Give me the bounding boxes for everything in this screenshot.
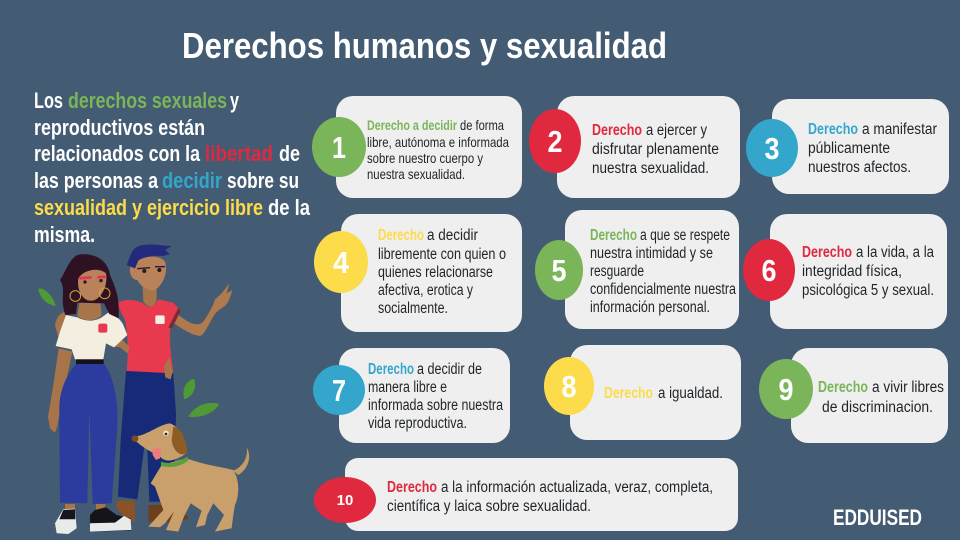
icon: number 10: 10 [337,492,353,509]
panel: derecho 3 [746,99,949,194]
icon: number 3: 3 [764,131,780,166]
text: derecho 5: Derecho [590,227,637,244]
text: derecho 1: nuestra sexualidad. [367,166,465,182]
intro text block: sobre su [227,168,299,193]
text: derecho 9 [818,379,944,416]
text: derecho 6: Derecho [802,244,852,261]
dog [132,423,249,532]
text: derecho 10: Derecho [387,479,437,496]
text: derecho 4: libremente con quien o [378,246,506,263]
icon: number 2: 2 [548,124,562,159]
intro text block: sexualidad y ejercicio libre [34,195,263,220]
icon: number 8 [544,357,594,415]
icon: number 5: 5 [552,253,566,288]
text: derecho 3 [808,121,937,176]
intro text block: las personas a [34,168,158,193]
text: derecho 7: a decidir de [417,361,482,378]
text: derecho 6: a la vida, a la [856,244,934,261]
intro text block: y [230,88,239,113]
text: derecho 10: a la información actualizada, veraz, completa, [441,479,713,496]
icon: number 9 [759,359,813,419]
icon: number 4: 4 [333,245,350,280]
icon: number 4 [314,231,368,293]
text: derecho 1: sobre nuestro cuerpo y [367,150,483,166]
intro text block: relacionados con la [34,141,200,166]
panel: derecho 2 [529,96,740,198]
text: derecho 1: de forma [460,117,504,133]
icon: number 2 [529,109,581,173]
text: derecho 6: psicológica 5 y sexual. [802,282,934,299]
text: derecho 7: Derecho [368,361,414,378]
woman [48,254,131,534]
text: derecho 5: a que se respete [640,227,730,244]
icon: number 8: 8 [562,369,576,404]
text: derecho 7 [368,361,503,432]
icon: number 6 [743,239,795,301]
text: derecho 9: Derecho [818,379,868,396]
text: derecho 1: libre, autónoma e informada [367,134,509,150]
brand label: EDDUISED [833,505,922,530]
intro text block [34,88,310,247]
text: derecho 4: afectiva, erotica y [378,282,473,299]
text: derecho 9: a vivir libres [872,379,944,396]
intro text block: misma. [34,222,95,247]
panel: derecho 7 [313,348,510,443]
intro text block: Los [34,88,63,113]
intro text block: libertad [205,141,273,166]
text: derecho 4: Derecho [378,227,424,244]
icon: number 3 [746,119,798,177]
icon: number 7 [313,365,365,415]
text: derecho 4 [378,227,506,317]
panel: derecho 1 [312,96,522,198]
text: derecho 7: vida reproductiva. [368,415,467,432]
panel: derecho 5 [535,210,739,329]
text: derecho 3: Derecho [808,121,858,138]
text: derecho 1: Derecho a decidir [367,117,457,133]
text: derecho 2: a ejercer y [646,122,707,139]
text: derecho 6 [802,244,934,299]
text: derecho 9: de discriminacion. [822,399,933,416]
panel: derecho 4 [314,214,522,332]
text: derecho 10: científica y laica sobre sexualidad. [387,498,591,515]
text: derecho 6: integridad física, [802,263,902,280]
icon: number 1 [312,117,366,177]
text: derecho 4: socialmente. [378,300,448,317]
text: derecho 2: disfrutar plenamente [592,141,719,158]
panel: derecho 10 [314,458,738,531]
text: derecho 8: Derecho [604,385,653,402]
icon: number 9: 9 [778,372,794,407]
icon: number 6: 6 [762,253,776,288]
icon: number 5 [535,240,583,300]
icon: number 7: 7 [332,373,346,408]
text: derecho 2: nuestra sexualidad. [592,160,709,177]
text: derecho 8: a igualdad. [658,385,723,402]
icon: number 1: 1 [332,130,346,165]
text: derecho 5: información personal. [590,299,710,316]
text: derecho 8 [604,385,723,402]
text: derecho 5: nuestra intimidad y se [590,245,713,262]
text: derecho 7: informada sobre nuestra [368,397,503,414]
panel: derecho 6 [743,214,947,329]
text: derecho 2: Derecho [592,122,642,139]
text: derecho 4: a decidir [427,227,478,244]
text: derecho 4: quienes relacionarse [378,264,493,281]
title: Derechos humanos y sexualidad [182,25,667,66]
text: derecho 2 [592,122,719,177]
panel: derecho 9 [759,348,948,443]
text: derecho 10 [387,479,713,515]
icon: number 10 [314,477,376,523]
intro text block: reproductivos están [34,115,205,140]
intro text block: derechos sexuales [68,88,227,113]
text: derecho 7: manera libre e [368,379,447,396]
intro text block: de [279,141,300,166]
text: derecho 3: públicamente [808,140,890,157]
intro text block: decidir [162,168,222,193]
intro text block: de la [268,195,310,220]
text: derecho 5 [590,227,736,316]
icon: leaves [38,289,219,417]
panel: derecho 8 [544,345,741,440]
text: derecho 3: a manifestar [862,121,937,138]
text: derecho 5: resguarde [590,263,644,280]
man [116,244,232,523]
text: derecho 5: confidencialmente nuestra [590,281,736,298]
text: derecho 3: nuestros afectos. [808,159,911,176]
text: derecho 1 [367,117,509,182]
illustration: couple with dog [38,244,249,534]
